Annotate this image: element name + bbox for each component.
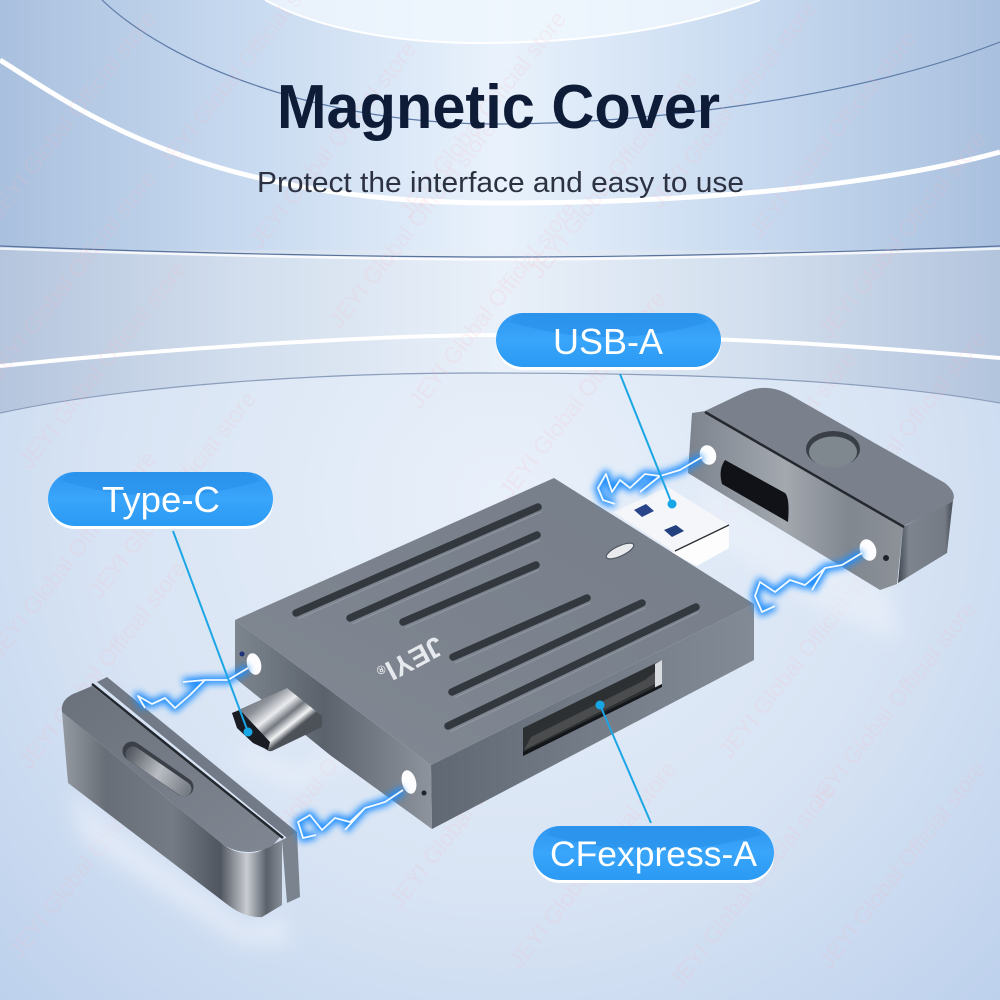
leader line bbox=[600, 705, 651, 823]
cap end face bbox=[898, 500, 953, 583]
decorative arcs bbox=[0, 0, 1000, 413]
leader dot bbox=[244, 728, 252, 736]
cap recess bbox=[132, 751, 184, 789]
watermarks: JEYI Global Official store bbox=[813, 326, 991, 543]
watermarks: JEYI Global Official store bbox=[323, 116, 501, 333]
Type-C plug bbox=[232, 688, 322, 751]
watermarks: JEYI Global Official store bbox=[493, 286, 671, 503]
watermarks: JEYI Global Official store bbox=[393, 6, 571, 223]
pill bbox=[533, 826, 774, 883]
label: CFexpress-A bbox=[550, 835, 758, 874]
pill bbox=[48, 472, 273, 529]
watermarks: JEYI Global Official store bbox=[813, 126, 991, 343]
vent slots bbox=[296, 507, 696, 726]
watermarks: JEYI Global Official store bbox=[243, 36, 421, 253]
magnet left front bbox=[399, 769, 419, 795]
lightning: Type-C side bbox=[138, 668, 248, 708]
watermarks: JEYI Global Official store bbox=[13, 556, 191, 773]
cap groove bbox=[705, 412, 904, 527]
label: Type-C bbox=[102, 479, 220, 520]
leader dot bbox=[668, 500, 676, 508]
magnet top bbox=[697, 443, 719, 467]
pill bbox=[496, 313, 721, 370]
vent slot highlights bbox=[298, 512, 699, 732]
title: Magnetic Cover bbox=[277, 73, 720, 142]
lightning: right cap bbox=[755, 553, 862, 612]
leader line bbox=[173, 531, 248, 732]
status LED bbox=[604, 540, 636, 562]
pin hole bbox=[883, 555, 889, 561]
cap back plate bbox=[282, 832, 300, 903]
cap round button bbox=[806, 431, 860, 468]
watermarks: JEYI Global Official store bbox=[683, 346, 861, 563]
cap tab strip bbox=[97, 677, 297, 838]
pin hole right bbox=[422, 790, 426, 796]
magnet bottom bbox=[857, 537, 879, 563]
lightning: USB-A side bbox=[598, 457, 702, 504]
left magnetic cap bbox=[62, 677, 300, 917]
watermarks: JEYI Global Official store bbox=[523, 66, 701, 283]
lightning: bottom front bbox=[298, 790, 403, 838]
callout: USB-A bbox=[496, 313, 721, 508]
icon: USB contact window 1 bbox=[634, 504, 654, 517]
top face bbox=[235, 478, 754, 765]
watermarks: JEYI Global Official store bbox=[3, 746, 181, 963]
watermarks: JEYI Global Official store bbox=[13, 256, 191, 473]
leader line bbox=[620, 374, 672, 504]
watermarks: JEYI Global Official store bbox=[383, 696, 561, 913]
front face bbox=[431, 604, 754, 829]
watermarks: JEYI Global Official store bbox=[803, 596, 981, 813]
cap top surface bbox=[62, 686, 281, 852]
callout: CFexpress-A bbox=[533, 700, 774, 883]
cap groove bbox=[92, 684, 283, 838]
floor reflections bbox=[68, 480, 900, 945]
CFexpress-A port bbox=[523, 660, 662, 756]
pin hole left bbox=[240, 652, 244, 656]
subtitle: Protect the interface and easy to use bbox=[257, 167, 744, 199]
leader dot bbox=[596, 700, 604, 710]
watermarks: JEYI Global Official store bbox=[713, 546, 891, 763]
watermarks: JEYI Global Official store bbox=[663, 776, 841, 993]
callout: Type-C bbox=[48, 472, 273, 736]
JEYI logo: JEYI® bbox=[372, 630, 448, 690]
watermarks: JEYI Global Official store bbox=[743, 26, 921, 243]
watermarks: JEYI Global Official store bbox=[643, 0, 821, 213]
watermarks: JEYI Global Official store bbox=[813, 756, 991, 973]
side face bbox=[235, 620, 432, 829]
cap connector cutout bbox=[721, 460, 789, 522]
label: USB-A bbox=[553, 321, 663, 362]
watermarks: JEYI Global Official store bbox=[233, 666, 411, 883]
magnet left rear bbox=[244, 652, 264, 676]
watermarks: JEYI Global Official store bbox=[403, 196, 581, 413]
icon: USB contact window 2 bbox=[664, 525, 684, 537]
watermarks: JEYI Global Official store bbox=[83, 386, 261, 603]
USB-A plug bbox=[613, 487, 729, 566]
right magnetic cap bbox=[688, 388, 954, 590]
watermarks: JEYI Global Official store bbox=[503, 756, 681, 973]
cap front surface bbox=[62, 712, 282, 917]
cap inner plate bbox=[688, 411, 903, 590]
cap top surface bbox=[705, 388, 954, 526]
card reader body bbox=[235, 478, 754, 829]
